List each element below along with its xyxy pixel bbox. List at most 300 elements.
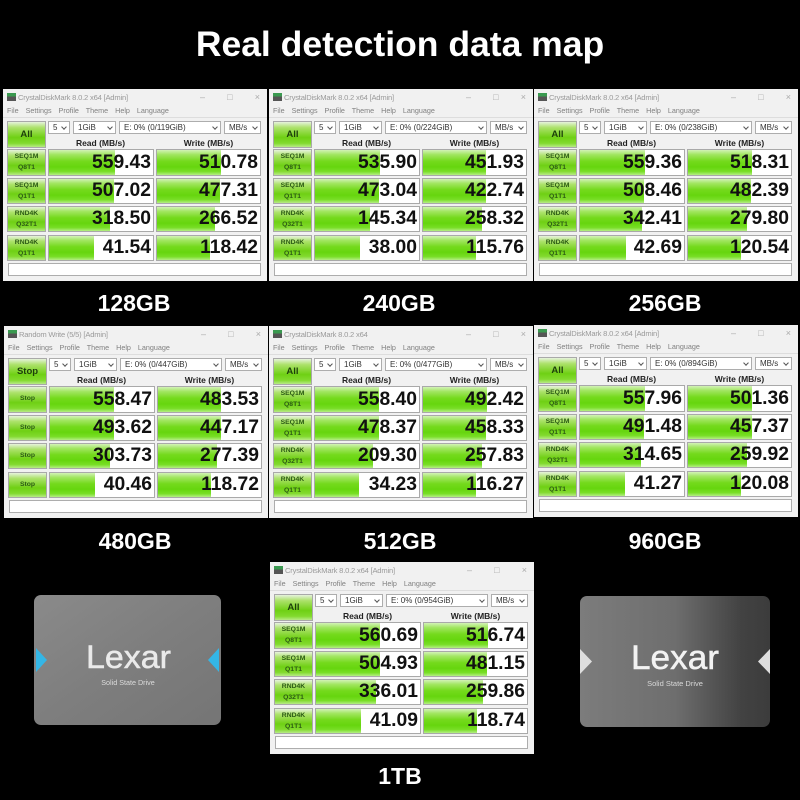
menu bar: File Settings Profile Theme Help Language <box>273 106 435 115</box>
write value: 422.74 <box>465 180 524 201</box>
write value <box>422 443 527 469</box>
dropdown: drive: E: 0% (0/119GiB) <box>124 123 186 132</box>
product image: Lexar SSD with white notches <box>580 596 770 727</box>
start button <box>273 121 312 148</box>
read value <box>579 385 685 412</box>
write value: 510.78 <box>199 152 258 172</box>
row button: stop 3: Stop <box>20 452 35 459</box>
read value <box>579 471 685 497</box>
dropdown: runs: 5 <box>319 360 323 369</box>
read value: 558.47 <box>93 388 152 410</box>
dropdown: unit <box>755 121 792 134</box>
dropdown: drive: E: 0% (0/238GiB) <box>655 123 717 132</box>
read value <box>315 679 421 705</box>
dropdown: unit <box>755 357 792 370</box>
window controls: – <box>731 92 736 102</box>
window controls: □ <box>228 329 234 339</box>
write value <box>422 206 527 232</box>
write value: 259.92 <box>730 444 789 465</box>
row label: RND4K Q32T1: RND4K <box>281 210 304 217</box>
dropdown: runs <box>49 358 71 371</box>
panel: 480GB benchmark window <box>4 326 268 518</box>
start button: All <box>551 129 564 140</box>
window controls: □ <box>758 328 764 338</box>
row label: RND4K Q32T1 <box>538 206 577 232</box>
dropdown: unit <box>225 358 262 371</box>
dropdown: unit: MB/s <box>496 596 514 605</box>
row label: SEQ1M Q1T1: Q1T1 <box>549 193 566 200</box>
menu bar: File Settings Profile Theme Help Language <box>274 579 436 588</box>
caption: 128GB: 128GB <box>98 290 170 316</box>
panel: 512GB benchmark window <box>269 326 533 518</box>
read value <box>49 472 155 498</box>
dropdown: runs <box>315 594 337 607</box>
start button <box>273 358 312 385</box>
window title: CrystalDiskMark 8.0.2 x64 [Admin] <box>284 93 394 102</box>
read value: 145.34 <box>358 208 417 229</box>
dropdown: drive: E: 0% (0/447GiB) <box>125 360 187 369</box>
status box <box>9 500 262 513</box>
window title: CrystalDiskMark 8.0.2 x64 <box>284 330 368 339</box>
dropdown: unit: MB/s <box>229 123 247 132</box>
row label: SEQ1M Q1T1: SEQ1M <box>546 418 569 425</box>
read value <box>315 651 421 677</box>
window controls <box>731 92 791 102</box>
write value: 447.17 <box>200 417 259 438</box>
read value <box>579 206 685 232</box>
write value: 457.37 <box>730 416 789 437</box>
dropdown: size: 1GiB <box>344 360 362 369</box>
read header: Read (MB/s) <box>343 611 392 621</box>
dropdown: runs: 5 <box>319 123 323 132</box>
dropdown: unit: MB/s <box>495 360 513 369</box>
panel: 256GB benchmark window <box>534 89 798 281</box>
write value <box>157 472 262 498</box>
dropdown: size <box>339 121 382 134</box>
row label: SEQ1M Q1T1 <box>273 415 312 441</box>
read value: 478.37 <box>358 417 417 438</box>
write header: Write (MB/s) <box>715 374 764 384</box>
menu bar: File Settings Profile Theme Help Language <box>538 342 700 351</box>
row label: RND4K Q1T1: Q1T1 <box>285 723 302 730</box>
write value: 279.80 <box>730 208 789 229</box>
dropdown: size <box>74 358 117 371</box>
read value <box>48 178 154 204</box>
dropdown: runs: 5 <box>320 596 324 605</box>
row label: SEQ1M Q8T1: Q8T1 <box>284 164 301 171</box>
row label: RND4K Q1T1: Q1T1 <box>18 250 35 257</box>
product image: Lexar SSD with white notches: Lexar <box>631 639 719 677</box>
panel: 240GB benchmark window <box>269 89 533 281</box>
row label: RND4K Q1T1 <box>274 708 313 734</box>
dropdown: drive: E: 0% (0/224GiB) <box>390 123 452 132</box>
read value <box>579 442 685 468</box>
row label: RND4K Q1T1 <box>273 235 312 261</box>
write value: 266.52 <box>199 208 258 229</box>
window controls <box>466 92 526 102</box>
row label: SEQ1M Q8T1 <box>273 386 312 413</box>
row label: RND4K Q32T1: Q32T1 <box>282 458 303 465</box>
row label: SEQ1M Q8T1: SEQ1M <box>546 389 569 396</box>
read value <box>314 472 420 498</box>
row label: RND4K Q1T1 <box>273 472 312 498</box>
caption: 256GB: 256GB <box>629 290 701 316</box>
write value <box>156 235 261 261</box>
dropdown: size <box>73 121 116 134</box>
stop button: Stop <box>17 366 38 377</box>
read value: 559.36 <box>623 152 682 172</box>
row label: SEQ1M Q1T1: SEQ1M <box>281 419 304 426</box>
write value: 492.42 <box>465 388 524 410</box>
write value <box>687 414 792 440</box>
read value: 560.69 <box>359 624 418 646</box>
write value: 277.39 <box>200 445 259 466</box>
read header: Read (MB/s) <box>607 138 656 148</box>
dropdown: drive <box>119 121 221 134</box>
dropdown: drive <box>385 121 487 134</box>
row button: stop 2 <box>8 415 47 441</box>
dropdown: runs <box>579 357 601 370</box>
dropdown: runs <box>314 358 336 371</box>
write value <box>687 385 792 412</box>
row label: RND4K Q32T1: RND4K <box>281 447 304 454</box>
caption: 240GB: 240GB <box>363 290 435 316</box>
read value <box>48 235 154 261</box>
start button: All <box>286 366 299 377</box>
row label: SEQ1M Q8T1: SEQ1M <box>281 153 304 160</box>
read value <box>314 178 420 204</box>
write value: 120.54 <box>730 237 789 258</box>
row label: RND4K Q32T1: Q32T1 <box>16 221 37 228</box>
write value: 118.74 <box>467 710 525 731</box>
read value: 209.30 <box>358 445 417 466</box>
write header: Write (MB/s) <box>184 138 233 148</box>
read value <box>314 235 420 261</box>
write value <box>687 206 792 232</box>
dropdown: drive <box>385 358 487 371</box>
read value <box>579 235 685 261</box>
write value <box>422 415 527 441</box>
row button: stop 3 <box>8 443 47 469</box>
read value: 504.93 <box>359 653 418 674</box>
dropdown: unit <box>490 358 527 371</box>
write value <box>156 149 261 176</box>
product image: Lexar SSD with blue notches: Lexar <box>86 639 171 675</box>
read value <box>579 149 685 176</box>
write value: 458.33 <box>465 417 524 438</box>
icon: app <box>7 93 16 101</box>
window controls: × <box>786 328 791 338</box>
write value: 118.42 <box>200 237 258 258</box>
row label: RND4K Q32T1 <box>274 679 313 705</box>
caption: 512GB: 512GB <box>364 528 436 554</box>
write value: 481.15 <box>466 653 525 674</box>
write value: 482.39 <box>730 180 789 201</box>
row label: RND4K Q1T1: RND4K <box>281 476 304 483</box>
dropdown: size <box>340 594 383 607</box>
window controls: □ <box>227 92 233 102</box>
start button <box>538 121 577 148</box>
panel: 960GB benchmark window <box>534 325 798 517</box>
write value <box>687 471 792 497</box>
icon: app <box>538 329 547 337</box>
write value: 501.36 <box>730 388 789 408</box>
window controls <box>466 329 526 339</box>
read value <box>49 415 155 441</box>
window controls: – <box>200 92 205 102</box>
read header: Read (MB/s) <box>342 375 391 385</box>
row label: RND4K Q1T1: RND4K <box>282 712 305 719</box>
row label: SEQ1M Q8T1 <box>538 149 577 176</box>
read value <box>49 386 155 413</box>
product image: Lexar SSD with blue notches: Solid State Drive <box>101 678 155 687</box>
window controls: – <box>201 329 206 339</box>
read value: 507.02 <box>92 180 151 201</box>
read value: 41.27 <box>634 473 682 494</box>
write value <box>423 651 528 677</box>
row label: RND4K Q1T1 <box>7 235 46 261</box>
write value <box>156 178 261 204</box>
menu bar: File Settings Profile Theme Help Language <box>7 106 169 115</box>
window controls <box>201 329 261 339</box>
read value: 491.48 <box>623 416 682 437</box>
dropdown: runs: 5 <box>584 359 588 368</box>
menu bar: File Settings Profile Theme Help Language <box>538 106 700 115</box>
row label: SEQ1M Q8T1 <box>273 149 312 176</box>
product image: Lexar SSD with white notches: Solid State Drive <box>647 679 703 688</box>
row label: SEQ1M Q8T1: Q8T1 <box>284 401 301 408</box>
row label: SEQ1M Q1T1 <box>274 651 313 677</box>
window controls: □ <box>494 565 500 575</box>
row label: SEQ1M Q8T1 <box>274 622 313 649</box>
dropdown: unit <box>224 121 261 134</box>
row button: stop 4 <box>8 472 47 498</box>
read value: 557.96 <box>623 388 682 408</box>
status box <box>539 499 792 512</box>
dropdown: drive <box>120 358 222 371</box>
menu bar: File Settings Profile Theme Help Language <box>273 343 435 352</box>
read value <box>48 149 154 176</box>
window controls: × <box>255 92 260 102</box>
status box <box>8 263 261 276</box>
start button: All <box>287 602 300 613</box>
row label: SEQ1M Q1T1: Q1T1 <box>285 666 302 673</box>
menu bar: File Settings Profile Theme Help Language <box>8 343 170 352</box>
read value: 342.41 <box>623 208 682 229</box>
write value <box>687 178 792 204</box>
window controls: □ <box>493 92 499 102</box>
row label: SEQ1M Q1T1: SEQ1M <box>546 182 569 189</box>
window controls: × <box>786 92 791 102</box>
write value <box>422 178 527 204</box>
row label: SEQ1M Q8T1: SEQ1M <box>15 153 38 160</box>
read value: 336.01 <box>359 681 418 702</box>
window controls <box>731 328 791 338</box>
row label: RND4K Q1T1 <box>538 235 577 261</box>
dropdown: size <box>604 357 647 370</box>
row label: RND4K Q32T1: Q32T1 <box>282 221 303 228</box>
dropdown: drive <box>650 121 752 134</box>
read value: 41.09 <box>370 710 418 731</box>
read value: 493.62 <box>93 417 152 438</box>
write header: Write (MB/s) <box>451 611 500 621</box>
status box <box>539 263 792 276</box>
write value <box>687 442 792 468</box>
row label: RND4K Q32T1 <box>7 206 46 232</box>
row label: SEQ1M Q8T1: Q8T1 <box>285 637 302 644</box>
write value: 118.72 <box>201 474 259 495</box>
row label: SEQ1M Q8T1: SEQ1M <box>546 153 569 160</box>
row label: SEQ1M Q8T1 <box>538 385 577 412</box>
panel: 1TB benchmark window <box>270 562 534 754</box>
read value <box>314 415 420 441</box>
window controls: × <box>521 329 526 339</box>
write header: Write (MB/s) <box>715 138 764 148</box>
dropdown: drive: E: 0% (0/477GiB) <box>390 360 452 369</box>
row label: SEQ1M Q1T1 <box>538 414 577 440</box>
dropdown: runs: 5 <box>54 360 58 369</box>
row label: SEQ1M Q1T1: SEQ1M <box>15 182 38 189</box>
window title: CrystalDiskMark 8.0.2 x64 [Admin] <box>549 329 659 338</box>
write value: 477.31 <box>199 180 258 201</box>
row label: RND4K Q32T1 <box>538 442 577 468</box>
icon: app <box>538 93 547 101</box>
icon: app <box>274 566 283 574</box>
icon: app <box>273 93 282 101</box>
row label: RND4K Q32T1: RND4K <box>546 446 569 453</box>
read value: 314.65 <box>623 444 682 465</box>
window controls: □ <box>758 92 764 102</box>
write value <box>157 415 262 441</box>
row label: SEQ1M Q8T1 <box>7 149 46 176</box>
read value: 318.50 <box>92 208 151 229</box>
row label: RND4K Q1T1: RND4K <box>546 475 569 482</box>
row label: RND4K Q1T1: Q1T1 <box>549 250 566 257</box>
icon: app <box>8 330 17 338</box>
dropdown: unit: MB/s <box>230 360 248 369</box>
row label: SEQ1M Q1T1: Q1T1 <box>284 193 301 200</box>
caption: 960GB: 960GB <box>629 528 701 554</box>
dropdown: size: 1GiB <box>609 123 627 132</box>
dropdown: size: 1GiB <box>79 360 97 369</box>
read value <box>49 443 155 469</box>
write header: Write (MB/s) <box>185 375 234 385</box>
write value: 451.93 <box>465 152 524 172</box>
row label: SEQ1M Q1T1 <box>538 178 577 204</box>
read value <box>579 178 685 204</box>
dropdown: size <box>339 358 382 371</box>
write header: Write (MB/s) <box>450 375 499 385</box>
dropdown: runs <box>314 121 336 134</box>
dropdown: unit: MB/s <box>495 123 513 132</box>
row button: stop 1: Stop <box>20 395 35 402</box>
write value <box>422 472 527 498</box>
start button <box>7 121 46 148</box>
row label: SEQ1M Q8T1: SEQ1M <box>282 626 305 633</box>
read value: 42.69 <box>634 237 682 258</box>
start button <box>274 594 313 621</box>
write value <box>157 443 262 469</box>
row label: SEQ1M Q1T1: SEQ1M <box>282 655 305 662</box>
row label: RND4K Q32T1 <box>273 443 312 469</box>
row label: SEQ1M Q8T1: Q8T1 <box>549 164 566 171</box>
row label: SEQ1M Q1T1: SEQ1M <box>281 182 304 189</box>
write value <box>687 235 792 261</box>
write value: 120.08 <box>730 473 789 494</box>
write value: 258.32 <box>465 208 524 229</box>
write value <box>422 149 527 176</box>
window title: CrystalDiskMark 8.0.2 x64 [Admin] <box>549 93 659 102</box>
write value <box>423 708 528 734</box>
row button: stop 2: Stop <box>20 424 35 431</box>
window title: CrystalDiskMark 8.0.2 x64 [Admin] <box>285 566 395 575</box>
window controls: × <box>522 565 527 575</box>
row label: SEQ1M Q8T1: Q8T1 <box>549 400 566 407</box>
dropdown: drive: E: 0% (0/954GiB) <box>391 596 453 605</box>
window controls: – <box>466 329 471 339</box>
row label: RND4K Q1T1: Q1T1 <box>284 487 301 494</box>
row button: stop 1 <box>8 386 47 413</box>
row label: RND4K Q32T1: Q32T1 <box>547 457 568 464</box>
row label: RND4K Q1T1 <box>538 471 577 497</box>
dropdown: runs <box>48 121 70 134</box>
write value <box>423 679 528 705</box>
write value <box>156 206 261 232</box>
row label: RND4K Q32T1 <box>273 206 312 232</box>
dropdown: drive <box>386 594 488 607</box>
caption: 480GB: 480GB <box>99 528 171 554</box>
read value: 508.46 <box>623 180 682 201</box>
dropdown: runs <box>579 121 601 134</box>
write value: 259.86 <box>466 681 525 702</box>
read value: 559.43 <box>92 152 151 172</box>
start button: All <box>286 129 299 140</box>
row label: RND4K Q32T1: RND4K <box>282 683 305 690</box>
dropdown: size: 1GiB <box>78 123 96 132</box>
read value <box>579 414 685 440</box>
row label: RND4K Q1T1: RND4K <box>546 239 569 246</box>
row label: SEQ1M Q1T1: Q1T1 <box>284 430 301 437</box>
row button: stop 4: Stop <box>20 481 35 488</box>
row label: SEQ1M Q8T1: SEQ1M <box>281 390 304 397</box>
row label: RND4K Q32T1: Q32T1 <box>547 221 568 228</box>
dropdown: runs: 5 <box>584 123 588 132</box>
caption: 1TB: 1TB <box>378 763 422 789</box>
read value: 535.90 <box>358 152 417 172</box>
write value: 116.27 <box>466 474 524 495</box>
window controls <box>200 92 260 102</box>
row label: RND4K Q1T1: RND4K <box>281 239 304 246</box>
read value <box>48 206 154 232</box>
row label: RND4K Q1T1: Q1T1 <box>549 486 566 493</box>
dropdown: runs: 5 <box>53 123 57 132</box>
write header: Write (MB/s) <box>450 138 499 148</box>
window controls: × <box>521 92 526 102</box>
write value <box>422 235 527 261</box>
window controls: – <box>467 565 472 575</box>
read value <box>315 622 421 649</box>
product image: Lexar SSD with blue notches <box>34 595 221 725</box>
read header: Read (MB/s) <box>342 138 391 148</box>
write value <box>422 386 527 413</box>
write value: 257.83 <box>465 445 524 466</box>
title: Real detection data map <box>196 24 604 64</box>
row label: SEQ1M Q1T1: Q1T1 <box>549 429 566 436</box>
dropdown: size: 1GiB <box>609 359 627 368</box>
row label: RND4K Q32T1: RND4K <box>15 210 38 217</box>
status box <box>275 736 528 749</box>
dropdown: drive: E: 0% (0/894GiB) <box>655 359 717 368</box>
